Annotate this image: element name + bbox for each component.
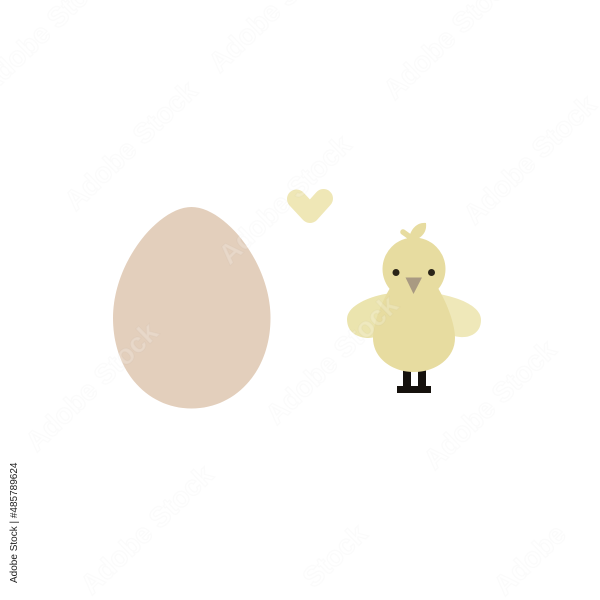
right eye	[428, 269, 435, 276]
chick	[347, 223, 481, 393]
watermarks: Adobe	[488, 518, 572, 600]
watermarks: Adobe Stock	[259, 289, 404, 430]
watermarks: Stock	[296, 518, 373, 593]
left wing	[347, 293, 400, 338]
head	[382, 238, 446, 300]
watermarks: Adobe Stock	[457, 89, 600, 230]
tuft	[403, 223, 426, 240]
beak	[406, 278, 422, 294]
stock id caption: Adobe Stock | #485789624	[9, 462, 20, 583]
watermarks: Adobe Stock	[19, 316, 164, 457]
legs	[397, 368, 431, 393]
watermarks: Adobe Stock	[74, 459, 219, 600]
watermarks: Adobe Stock	[417, 334, 562, 475]
body	[373, 288, 455, 372]
egg	[113, 207, 270, 408]
icon: heart	[296, 198, 324, 214]
right wing	[430, 293, 481, 337]
watermarks: Adobe Stock	[212, 129, 357, 270]
watermarks: Adobe Stock	[58, 75, 203, 216]
left eye	[392, 269, 400, 276]
